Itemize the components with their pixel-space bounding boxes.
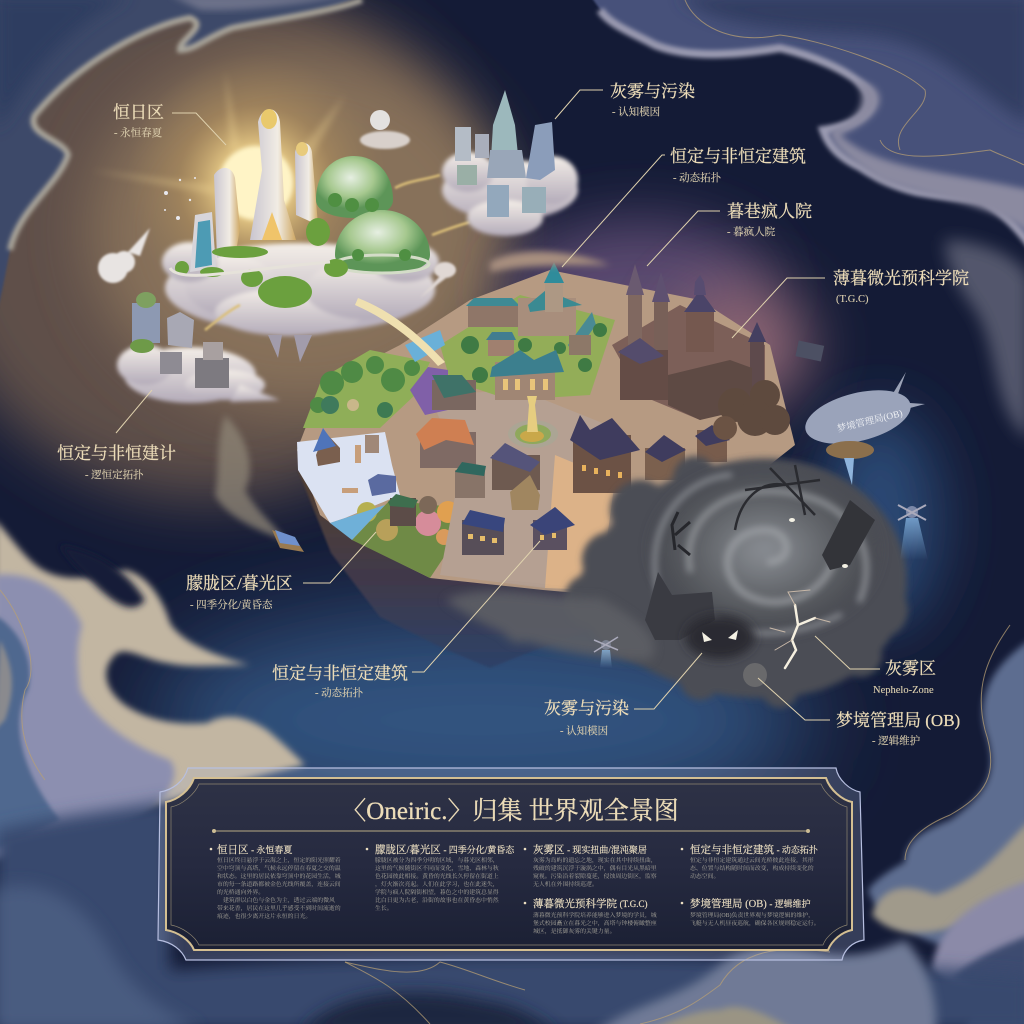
hanging rocks bbox=[268, 335, 312, 362]
column: 梦境管理局: 梦境管理局(OB)负责世界观与梦境逻辑的维护， bbox=[690, 911, 814, 919]
callout: 暮巷疯人院: 暮巷疯人院 bbox=[727, 202, 812, 221]
sanatorium castle bbox=[612, 264, 766, 420]
little boat bbox=[272, 530, 304, 552]
callout: 薄暮微光预科学院 bbox=[732, 269, 969, 338]
river and bridge landing bbox=[405, 330, 445, 362]
patrol drone right bbox=[898, 505, 928, 560]
column: 恒定与非恒定建筑: 恒定与非恒定建筑 - 动态拓扑 bbox=[690, 843, 818, 856]
sun island cloud bbox=[162, 242, 439, 336]
golden bridge to academy bbox=[355, 298, 445, 366]
sun glow behind towers bbox=[90, 53, 386, 313]
orange roof house bbox=[416, 418, 476, 468]
panel glass frame bbox=[158, 768, 864, 960]
column: 灰雾区: 灰雾为岛屿的遗忘之地，现实在其中持续扭曲， bbox=[533, 856, 657, 864]
airship OB: 梦境管理局(OB) bbox=[836, 407, 904, 435]
top right skyscrapers bbox=[455, 90, 555, 217]
snow zone bbox=[297, 432, 400, 523]
callout: 恒定与非恒定建筑 top: - 动态拓扑 bbox=[673, 171, 722, 184]
column: 朦胧区: 朦胧区被分为四季分明的区域，与暮光区相邻， bbox=[375, 856, 499, 864]
column: 薄暮微光预科学院 bbox=[524, 897, 657, 935]
column: 恒定与非恒定建筑: 恒定与非恒定建筑通过云间光桥彼此连接，其形 bbox=[690, 856, 814, 864]
callout: 灰雾区 bbox=[815, 636, 936, 696]
dusk tree cluster bbox=[713, 380, 790, 440]
column: 朦胧区 bbox=[366, 843, 515, 912]
green park zone bbox=[303, 350, 430, 428]
callout: 朦胧区/暮光区 bbox=[186, 532, 376, 611]
callout: 梦境管理局: - 逻辑维护 bbox=[872, 734, 921, 747]
garden domes bbox=[316, 156, 430, 274]
column: 恒日区: 带来花香，居民在这里几乎感受不到时间流逝的 bbox=[217, 904, 341, 912]
floating island bbox=[297, 262, 795, 668]
callout: 恒定与非恒定建筑 bottom: 恒定与非恒定建筑 bbox=[272, 664, 408, 683]
callout: 灰雾区: 灰雾区 bbox=[885, 659, 936, 678]
snow house bbox=[368, 474, 396, 496]
callout: 恒日区: 恒日区 bbox=[113, 103, 164, 122]
callout: 暮巷疯人院: - 暮疯人院 bbox=[727, 225, 776, 238]
lightning crack bbox=[770, 590, 830, 668]
column: 恒定与非恒定建筑: 态、位置与结构随时间而改变，构成持续变化的 bbox=[690, 864, 814, 872]
column: 灰雾区: 残破的建筑沉浮于漩涡之中，偶有目光从黑暗里 bbox=[533, 864, 657, 872]
callout: 恒定与非恒定建筑 top bbox=[562, 147, 806, 267]
column: 梦境管理局: 梦境管理局 (OB) - 逻辑维护 bbox=[690, 897, 811, 910]
column: 梦境管理局 bbox=[681, 897, 820, 927]
solar towers bbox=[190, 109, 318, 272]
right puff bbox=[420, 262, 456, 298]
airship OB bbox=[800, 372, 925, 485]
vortex spiral bbox=[655, 475, 866, 633]
column: 恒日区 bbox=[210, 843, 341, 920]
left cloud buildings bbox=[130, 292, 229, 388]
column: 薄暮微光预科学院: 城区，是抵御灰雾的关键力量。 bbox=[533, 927, 615, 935]
wrecked houses in fog bbox=[645, 465, 875, 640]
callout: 灰雾与污染 bottom: 灰雾与污染 bbox=[544, 699, 629, 718]
terrace gardens bbox=[175, 218, 348, 308]
left lower cloud bbox=[117, 345, 280, 403]
column: 灰雾区: 无人机在外围持续巡逻。 bbox=[533, 880, 598, 888]
column: 恒日区: 空中穹顶与高塔，气候永远停留在春夏之交的温 bbox=[217, 864, 341, 872]
dusk townhouses bbox=[570, 415, 730, 493]
callout: 暮巷疯人院 bbox=[647, 202, 812, 266]
cargo cart bbox=[795, 340, 824, 362]
callout: 恒定与非恒建计: - 逻恒定拓扑 bbox=[85, 468, 144, 481]
smoke right side bbox=[868, 240, 1024, 1024]
glowing fog eyes bbox=[702, 518, 848, 642]
island ground bbox=[297, 270, 795, 595]
column: 薄暮微光预科学院: 薄暮微光预科学院 (T.G.C) bbox=[533, 897, 647, 910]
column: 朦胧区: ，灯火渐次亮起。人们在此学习，也在此迷失， bbox=[375, 880, 499, 888]
dusk wisps bbox=[490, 251, 610, 272]
column: 灰雾区: 窥视。污染沿着裂隙蔓延，侵蚀周边街区，监察 bbox=[533, 872, 657, 880]
purple roof house bbox=[410, 367, 476, 415]
column: 恒日区: 的光桥通向外界。 bbox=[217, 888, 264, 896]
column: 恒日区: 痕迹，也很少离开这片永恒的日光。 bbox=[217, 912, 311, 920]
callout: 薄暮微光预科学院: (T.G.C) bbox=[836, 294, 869, 305]
smoke top left bbox=[0, 0, 362, 320]
callout: 灰雾区: Nephelo-Zone bbox=[873, 685, 934, 696]
manor with teal roof bbox=[490, 350, 564, 400]
academy lawn bbox=[440, 295, 615, 400]
column: 朦胧区: 这里的气候随街区不同而变化，雪地、森林与秋 bbox=[375, 864, 499, 872]
snow cabin bbox=[313, 428, 340, 466]
column: 薄暮微光预科学院: 堡式校园矗立在暮光之中，高塔与钟楼俯瞰整座 bbox=[533, 919, 657, 927]
callout: 恒定与非恒建计: 恒定与非恒建计 bbox=[57, 444, 176, 463]
column: 灰雾区 bbox=[524, 843, 657, 888]
dark fog around eyes bbox=[685, 615, 755, 659]
callout: 朦胧区/暮光区: - 四季分化/黄昏态 bbox=[190, 598, 273, 611]
column: 恒日区: 和状态。这里的居民依靠穹顶中的花园生活，城 bbox=[217, 872, 341, 880]
callout: 恒日区: - 永恒春夏 bbox=[114, 126, 163, 139]
fountain statue bbox=[508, 396, 558, 448]
smoke left cream swirl bbox=[0, 520, 305, 860]
smoke top right bbox=[590, 0, 1024, 245]
top right cloud bbox=[442, 152, 578, 236]
column: 恒日区: 建筑群以白色与金色为主，透过云端的微风 bbox=[223, 896, 335, 904]
column: 薄暮微光预科学院: 薄暮微光预科学院培养能够进入梦境的学员，城 bbox=[533, 911, 657, 919]
patrol drone left bbox=[594, 637, 618, 668]
dim moon bbox=[743, 663, 767, 687]
callout: 梦境管理局 bbox=[758, 678, 960, 747]
callout: 梦境管理局: 梦境管理局 (OB) bbox=[836, 711, 960, 730]
sparkling shards bbox=[164, 177, 196, 220]
academy main hall and clock tower bbox=[461, 262, 607, 383]
column: 朦胧区: 学院与疯人院隔街相望，暮色之中的建筑总显得 bbox=[375, 888, 499, 896]
column: 恒日区: 市的每一条道路都被金色光线所覆盖，连接云间 bbox=[217, 880, 341, 888]
callout: 灰雾与污染 bottom: - 认知模因 bbox=[560, 724, 608, 737]
panel inner plate bbox=[166, 778, 852, 950]
panel title: 〈Oneiric.〉归集 世界观全景图 bbox=[341, 797, 679, 825]
column: 恒定与非恒定建筑: 动态空间。 bbox=[690, 872, 719, 880]
autumn garden bbox=[352, 500, 462, 578]
small sphere cloud bbox=[360, 110, 410, 149]
callout: 恒日区 bbox=[113, 103, 226, 145]
callout: 灰雾与污染 top: - 认知模因 bbox=[612, 105, 660, 118]
island underside rock bbox=[298, 470, 610, 668]
gray fog vortex bbox=[445, 456, 908, 708]
column: 恒定与非恒定建筑 bbox=[681, 843, 818, 880]
column: 梦境管理局: 飞艇与无人机昼夜巡航，确保各区规则稳定运行。 bbox=[690, 919, 820, 927]
callout: 恒定与非恒定建筑 top: 恒定与非恒定建筑 bbox=[670, 147, 806, 166]
column: 恒日区: 恒日区终日悬浮于云海之上，恒定的阳光照耀着 bbox=[217, 856, 341, 864]
sky cloud islands bbox=[98, 90, 610, 403]
snowmelt water bbox=[330, 505, 385, 540]
callout: 灰雾与污染 top: 灰雾与污染 bbox=[610, 82, 695, 101]
golden links bbox=[205, 175, 470, 330]
column: 恒日区: 恒日区 - 永恒春夏 bbox=[217, 843, 292, 856]
column: 朦胧区: 生长。 bbox=[375, 904, 393, 912]
callout: 灰雾与污染 top bbox=[555, 82, 695, 119]
callout: 灰雾与污染 bottom bbox=[544, 653, 702, 737]
left puff bbox=[98, 228, 150, 283]
middle houses bbox=[455, 443, 540, 510]
title divider bbox=[212, 829, 810, 833]
callout: 恒定与非恒建计 bbox=[57, 390, 176, 481]
callout: 恒定与非恒定建筑 bottom bbox=[272, 541, 540, 699]
callout: 朦胧区/暮光区: 朦胧区/暮光区 bbox=[186, 574, 293, 593]
blue houses bbox=[462, 507, 575, 555]
callout: 恒定与非恒定建筑 bottom: - 动态拓扑 bbox=[315, 686, 364, 699]
smoke wisp near boat bbox=[215, 415, 285, 540]
vehicles bbox=[272, 340, 928, 668]
column: 朦胧区: 比白日更为古老，沿街的故事也在黄昏态中悄然 bbox=[375, 896, 499, 904]
column: 灰雾区: 灰雾区 - 现实扭曲/混沌聚居 bbox=[533, 843, 647, 856]
panel: world overview plaque bbox=[158, 768, 864, 960]
column: 朦胧区: 朦胧区/暮光区 - 四季分化/黄昏态 bbox=[375, 843, 515, 856]
callout: 薄暮微光预科学院: 薄暮微光预科学院 bbox=[833, 269, 969, 288]
smoke bottom bbox=[0, 800, 1024, 1024]
plaza streets bbox=[430, 390, 620, 590]
column: 朦胧区: 色花园彼此相接。黄昏的光线长久停留在街道上 bbox=[375, 872, 499, 880]
